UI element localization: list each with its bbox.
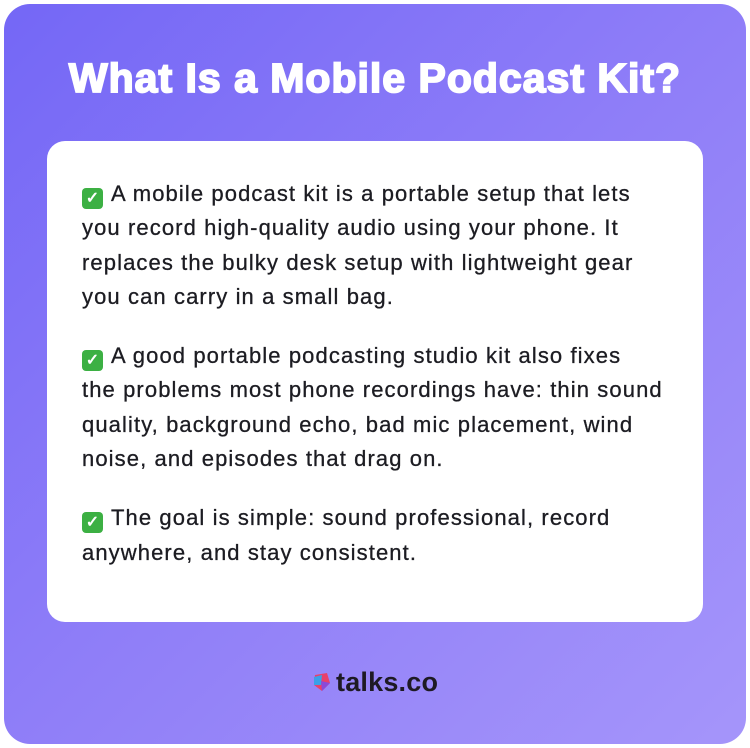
text block: paragraph 2: ✓ [86,352,99,369]
text block: paragraph 3: ✓ [86,514,99,531]
text block: paragraph 2: the problems most phone recordings have: thin sound [82,377,663,402]
text block: paragraph 1: ✓ [86,190,99,207]
text block: paragraph 1 [82,181,633,309]
text block: paragraph 2: noise, and episodes that drag on. [82,446,444,471]
logo: talks.co [336,666,438,696]
text block: paragraph 3: anywhere, and stay consistent. [82,540,417,565]
text block: paragraph 1: A mobile podcast kit is a portable setup that lets [111,181,631,206]
text block: paragraph 1: replaces the bulky desk setup with lightweight gear [82,250,633,275]
text block: paragraph 3: The goal is simple: sound professional, record [111,505,610,530]
text block: paragraph 3 [82,505,610,565]
text block: paragraph 2: A good portable podcasting studio kit also fixes [111,343,621,368]
icon: logo mark [314,673,330,691]
text block: paragraph 1: you can carry in a small bag. [82,284,394,309]
text block: paragraph 2 [82,343,663,471]
panel: text content [47,141,703,622]
text block: paragraph 1: you record high-quality audio using your phone. It [82,215,619,240]
text block: paragraph 2: quality, background echo, bad mic placement, wind [82,412,633,437]
title: What Is a Mobile Podcast Kit? [69,55,681,101]
